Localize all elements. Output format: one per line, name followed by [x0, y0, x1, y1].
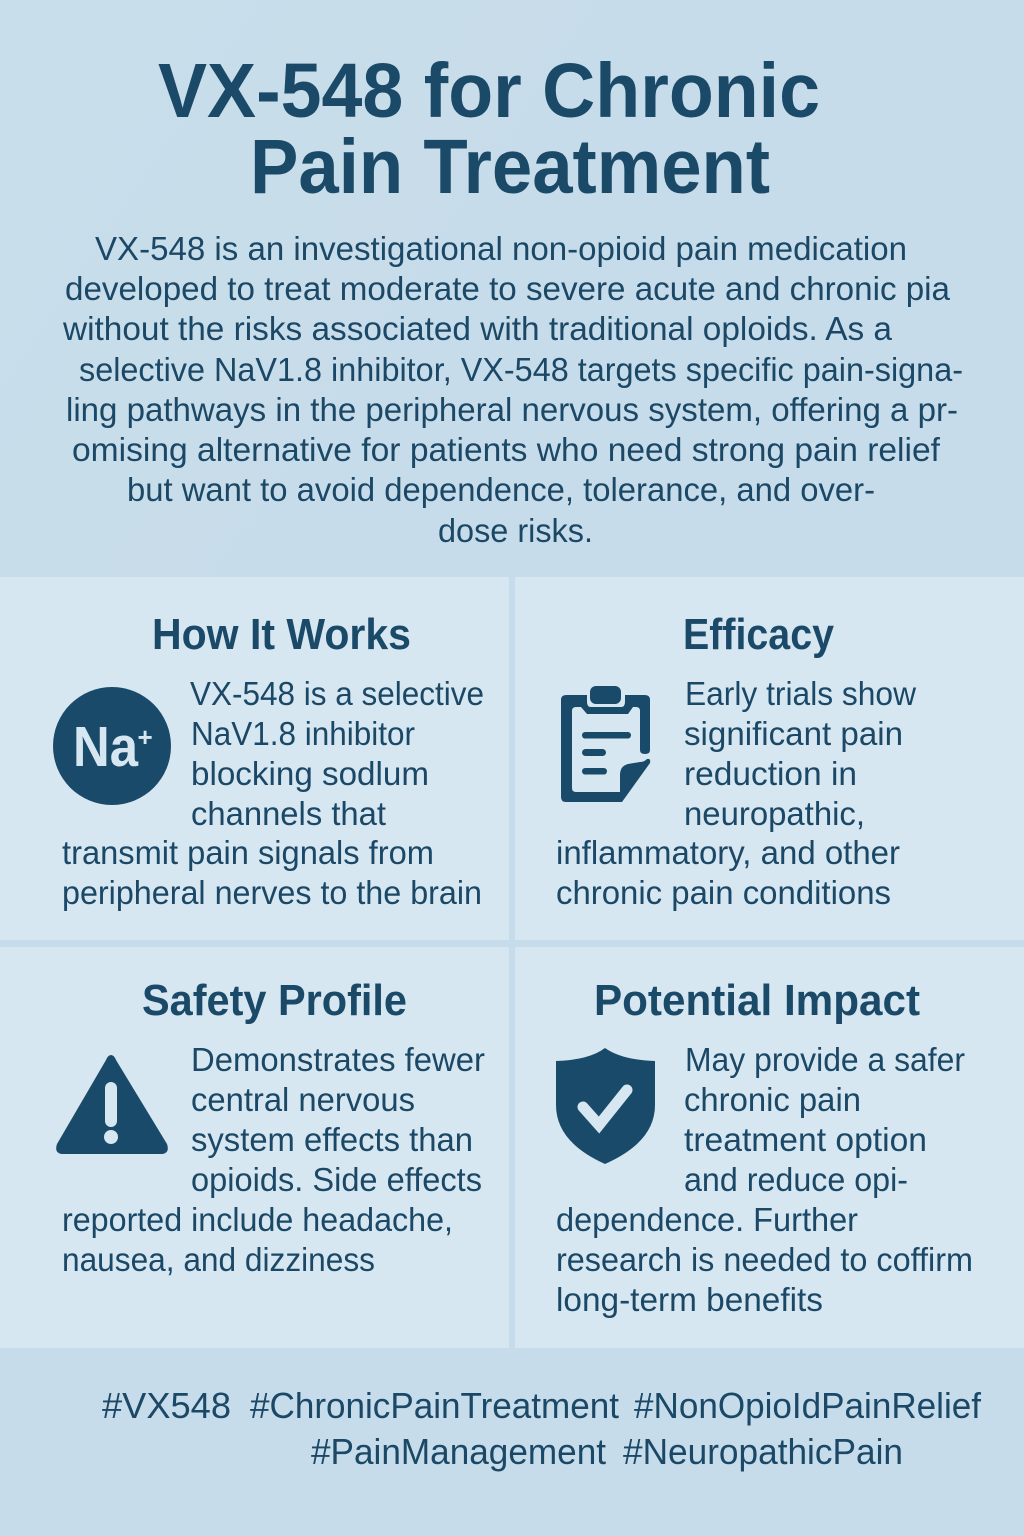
icon: sodium ion: +	[138, 722, 153, 752]
efficacy text	[556, 675, 916, 911]
title: Pain Treatment	[250, 124, 770, 210]
safety profile text: nausea, and dizziness	[62, 1241, 375, 1278]
icon: clipboard	[561, 686, 650, 802]
hashtags: #VX548	[102, 1385, 231, 1426]
hashtags	[102, 1385, 982, 1472]
intro text block: VX-548 is an investigational non-opioid pain medication	[95, 230, 907, 267]
safety profile text: system effects than	[191, 1121, 473, 1158]
title	[158, 48, 820, 210]
potential impact text	[556, 1041, 973, 1318]
how it works text: transmit pain signals from	[62, 834, 434, 871]
efficacy text: significant pain	[684, 715, 903, 752]
panel: efficacy	[515, 577, 1024, 940]
title: VX-548 for Chronic	[158, 48, 820, 134]
efficacy text: neuropathic,	[684, 795, 865, 832]
hashtags: #ChronicPainTreatment	[250, 1385, 619, 1426]
intro text block	[62, 230, 963, 549]
safety profile text: central nervous	[191, 1081, 415, 1118]
icon: shield with check	[556, 1048, 655, 1164]
heading: safety profile: Safety Profile	[142, 976, 407, 1025]
how it works text: VX-548 is a selective	[190, 675, 484, 712]
efficacy text: Early trials show	[685, 675, 916, 712]
icon: sodium ion	[53, 687, 171, 805]
panel: safety profile	[0, 947, 509, 1348]
panel: how it works	[0, 577, 509, 940]
intro text block: dose risks.	[438, 512, 593, 549]
potential impact text: research is needed to coffirm	[556, 1241, 973, 1278]
hashtags: #NeuropathicPain	[623, 1431, 903, 1472]
how it works text: blocking sodlum	[191, 755, 429, 792]
icon: sodium ion: Na	[73, 715, 139, 779]
intro text block: without the risks associated with traditional oploids. As a	[62, 310, 893, 347]
potential impact text: and reduce opi-	[684, 1161, 908, 1198]
intro text block: developed to treat moderate to severe acute and chronic pia	[65, 270, 951, 307]
heading: efficacy: Efficacy	[683, 610, 834, 659]
safety profile text	[62, 1041, 485, 1278]
intro text block: ling pathways in the peripheral nervous system, offering a pr-	[66, 391, 958, 428]
efficacy text: chronic pain conditions	[556, 874, 891, 911]
intro text block: selective NaV1.8 inhibitor, VX-548 targets specific pain-signa-	[79, 351, 963, 388]
heading: how it works: How It Works	[152, 610, 411, 659]
panel: potential impact	[515, 947, 1024, 1348]
potential impact text: treatment option	[684, 1121, 927, 1158]
intro text block: but want to avoid dependence, tolerance, and over-	[127, 471, 875, 508]
icon: warning triangle	[56, 1055, 168, 1154]
intro text block: omising alternative for patients who need strong pain relief	[72, 431, 941, 468]
potential impact text: chronic pain	[684, 1081, 861, 1118]
heading: potential impact: Potential Impact	[594, 976, 920, 1025]
how it works text: peripheral nerves to the brain	[62, 874, 482, 911]
hashtags: #PainManagement	[311, 1431, 606, 1472]
safety profile text: reported include headache,	[62, 1201, 453, 1238]
how it works text	[62, 675, 484, 911]
how it works text: NaV1.8 inhibitor	[191, 715, 415, 752]
efficacy text: inflammatory, and other	[556, 834, 900, 871]
hashtags: #NonOpioIdPainRelief	[634, 1385, 982, 1426]
efficacy text: reduction in	[684, 755, 857, 792]
potential impact text: May provide a safer	[685, 1041, 965, 1078]
safety profile text: Demonstrates fewer	[191, 1041, 485, 1078]
safety profile text: opioids. Side effects	[191, 1161, 482, 1198]
how it works text: channels that	[191, 795, 386, 832]
potential impact text: long-term benefits	[556, 1281, 823, 1318]
potential impact text: dependence. Further	[556, 1201, 858, 1238]
